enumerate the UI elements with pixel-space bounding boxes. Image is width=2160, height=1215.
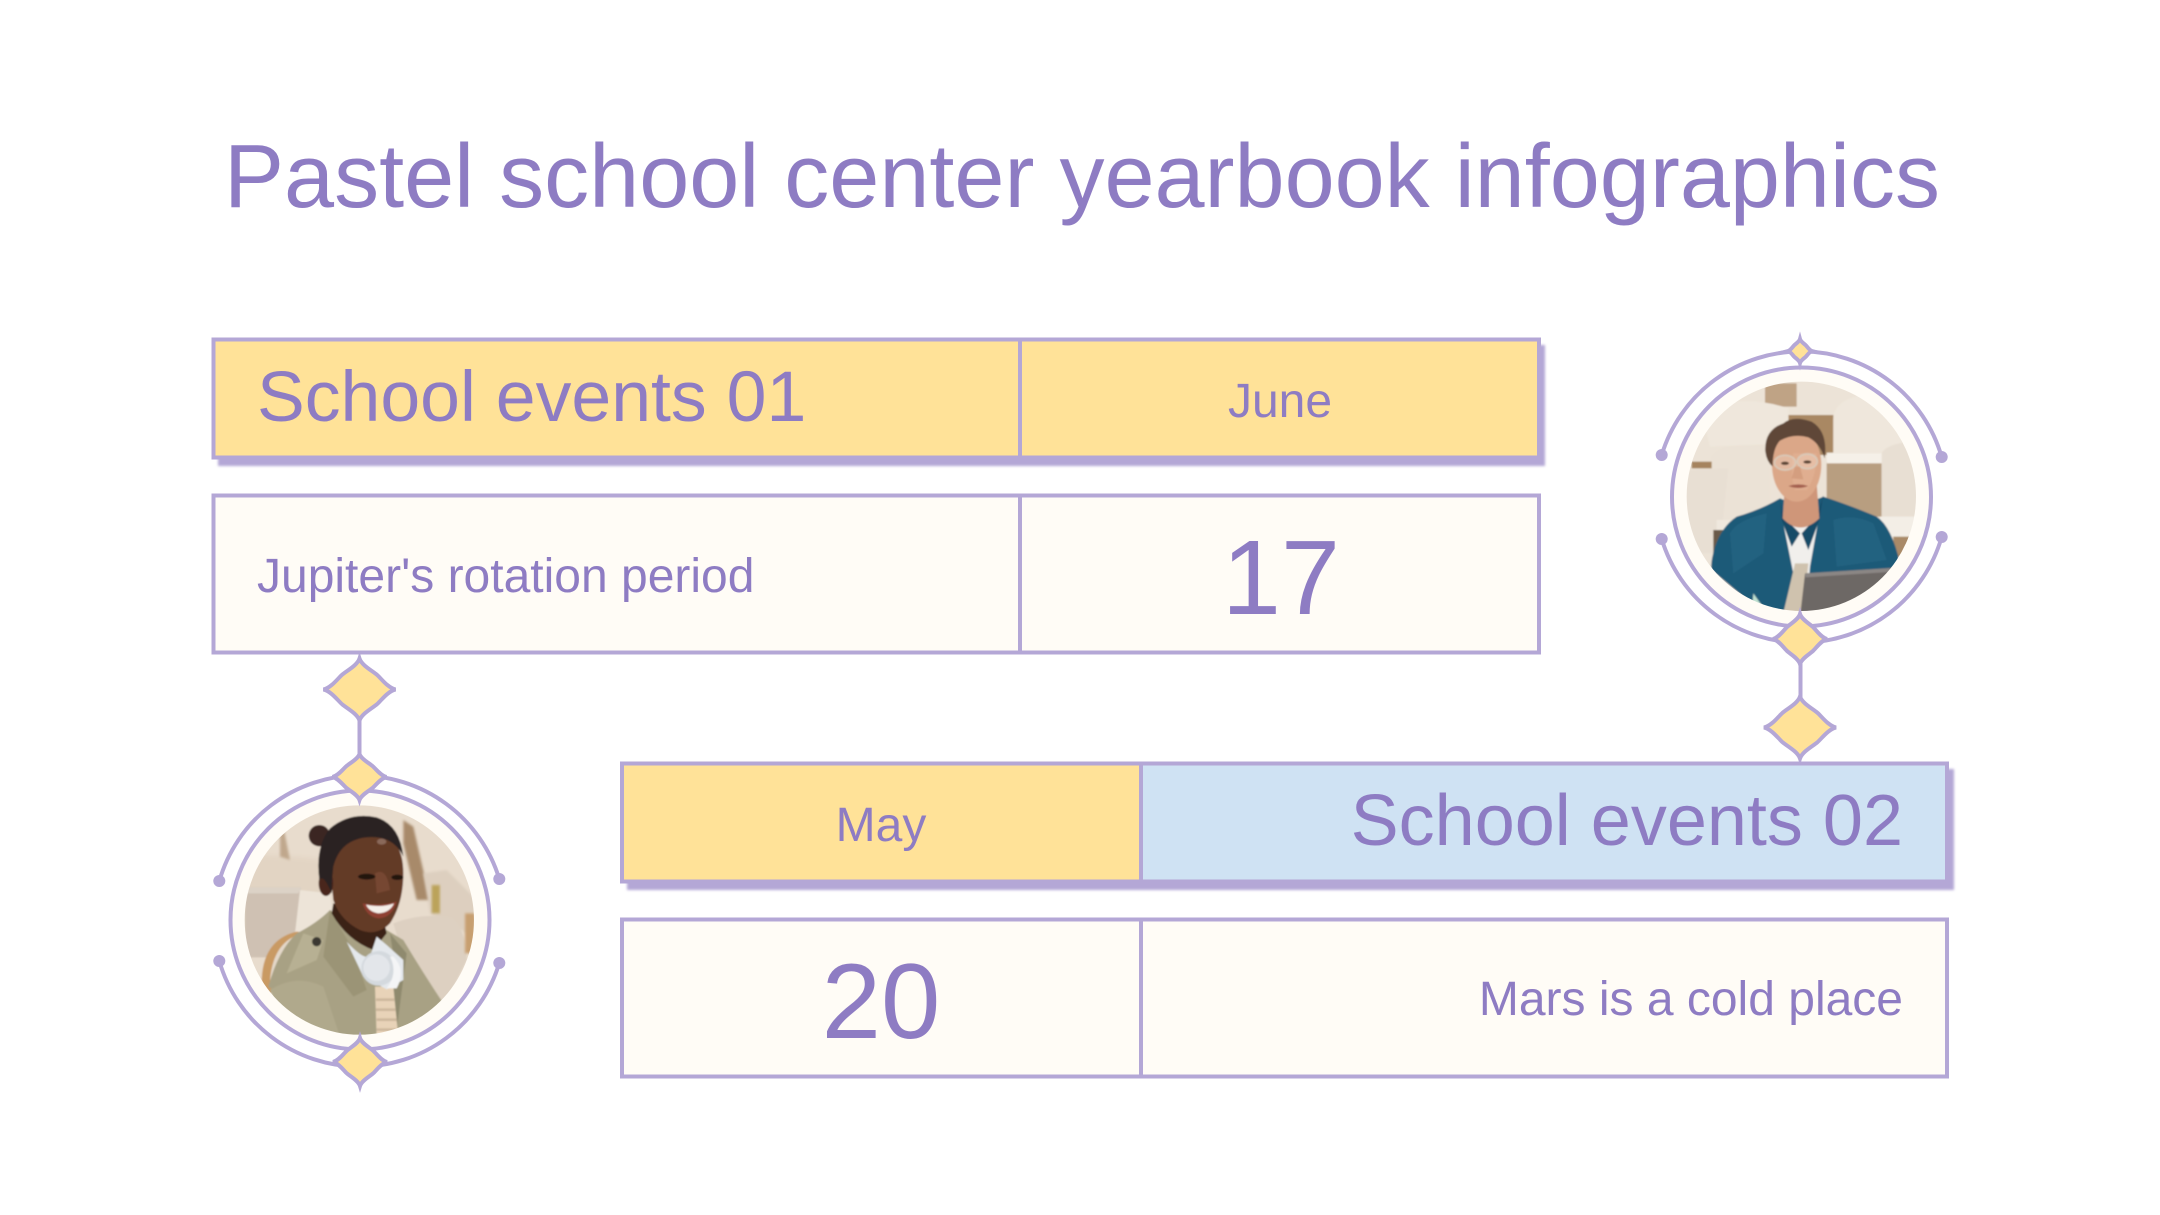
hair bbox=[309, 825, 330, 846]
headphones bbox=[347, 937, 403, 989]
icon: large star 1 bbox=[1764, 696, 1836, 758]
face bbox=[330, 830, 403, 932]
body cell: 17: 17 bbox=[1222, 519, 1340, 637]
neck bbox=[332, 903, 387, 950]
jacket bbox=[1711, 497, 1900, 617]
header cell: May bbox=[622, 764, 1141, 882]
arc end dots 1 bbox=[1656, 449, 1948, 545]
header shadow 01 bbox=[218, 345, 1545, 466]
photo: smiling student with headphones bbox=[240, 800, 480, 1040]
header shadow 02 bbox=[627, 769, 1954, 890]
ring frame 2 bbox=[219, 775, 499, 1067]
header cell: June: June bbox=[1228, 375, 1332, 428]
photo: student with glasses bbox=[1683, 377, 1920, 617]
eyes bbox=[358, 874, 375, 880]
header cell: School events 01 bbox=[214, 340, 1020, 458]
jacket bbox=[268, 910, 443, 1037]
icon: medium star bottom 1 bbox=[1773, 614, 1827, 664]
table: school events 02 bbox=[622, 764, 1954, 1076]
icon: medium star top 2 bbox=[332, 754, 386, 800]
icon: small star top 1 bbox=[1788, 339, 1812, 363]
header cell: School events 01: School events 01 bbox=[257, 357, 806, 437]
connector line 2 bbox=[358, 715, 362, 760]
icon: medium star bottom 2 bbox=[333, 1038, 387, 1086]
table: school events 01 bbox=[214, 340, 1545, 652]
neck bbox=[1783, 483, 1819, 527]
shirt bbox=[375, 987, 398, 1037]
title: Pastel school center yearbook infographics bbox=[224, 127, 1940, 227]
icon: large star 2 bbox=[324, 658, 396, 720]
laptop bbox=[1800, 566, 1892, 611]
header cell: School events 02 bbox=[1141, 764, 1947, 882]
body cell: 20 bbox=[622, 920, 1141, 1076]
ring frame 1 bbox=[1662, 351, 1942, 643]
header cell: June bbox=[1020, 340, 1539, 458]
header cell: May: May bbox=[836, 799, 926, 852]
connector line 1 bbox=[1798, 655, 1802, 700]
shirt bbox=[1782, 524, 1818, 574]
body cell: 20: 20 bbox=[822, 941, 940, 1061]
body cell: Mars is a cold place: Mars is a cold place bbox=[1479, 973, 1903, 1026]
portrait frame: smiling student with headphones bbox=[213, 658, 505, 1086]
body cell: Jupiter's rotation period bbox=[214, 496, 1020, 652]
arc end dots 2 bbox=[213, 873, 505, 969]
face bbox=[1772, 428, 1821, 502]
glasses bbox=[1774, 454, 1817, 470]
eyes bbox=[1781, 462, 1789, 465]
hair bbox=[1765, 419, 1825, 467]
body cell: Mars is a cold place bbox=[1141, 920, 1947, 1076]
smile bbox=[363, 902, 397, 918]
collar bbox=[1781, 510, 1801, 547]
body cell: 17 bbox=[1020, 496, 1539, 652]
body cell: Jupiter's rotation period: Jupiter's rotation period bbox=[257, 550, 754, 603]
header cell: School events 02: School events 02 bbox=[1351, 781, 1903, 861]
portrait frame: student with glasses bbox=[1656, 339, 1948, 758]
